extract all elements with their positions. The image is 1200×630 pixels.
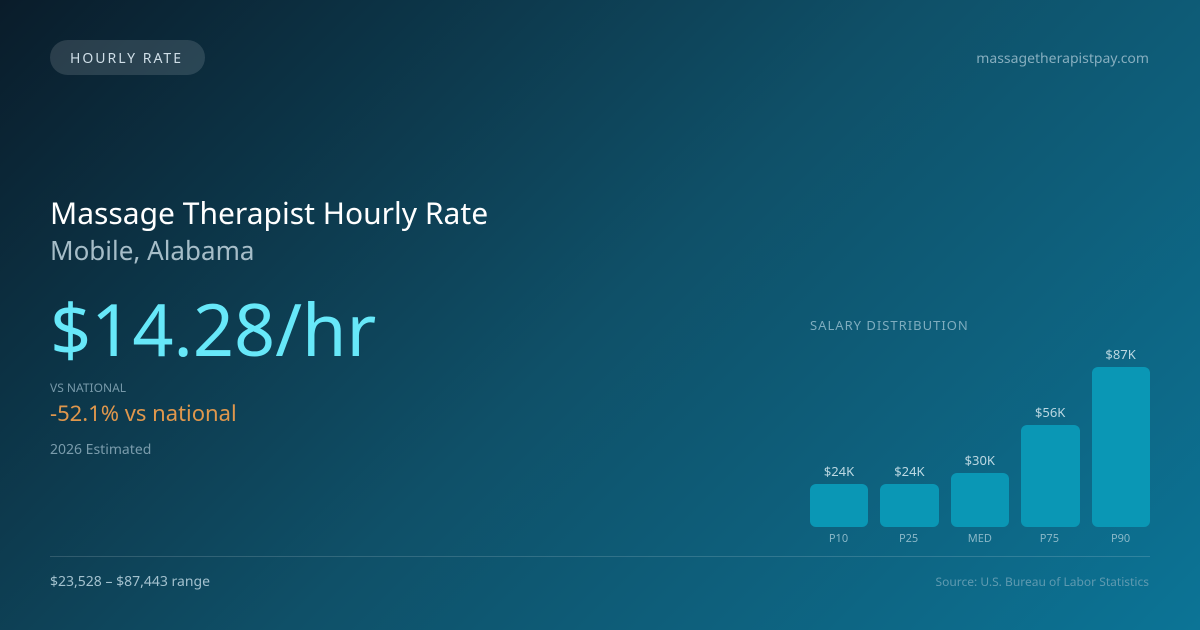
bar P25 (880, 462, 939, 546)
chart: salary distribution (810, 316, 1150, 546)
chart: salary distribution: P75 (1040, 531, 1059, 546)
chart: salary distribution: P10 (829, 531, 848, 546)
chart: salary distribution: $56K (1035, 403, 1065, 421)
chart: salary distribution: P90 (1111, 531, 1130, 546)
location subtitle: Mobile, Alabama (50, 232, 254, 268)
salary range: $23,528 – $87,443 range (50, 572, 210, 591)
chart: salary distribution: $24K (824, 462, 854, 480)
estimate note: 2026 Estimated (50, 440, 151, 459)
badge: hourly rate (50, 40, 205, 75)
site URL: massagetherapistpay.com (976, 49, 1149, 68)
bar median (951, 451, 1009, 546)
bar P90 (1092, 345, 1150, 546)
chart: salary distribution: P25 (899, 531, 918, 546)
badge: hourly rate: HOURLY RATE (70, 49, 183, 68)
title: Massage Therapist Hourly Rate (50, 192, 488, 233)
hourly rate value: $14.28/hr (50, 280, 376, 378)
chart heading: SALARY DISTRIBUTION (810, 316, 969, 334)
comparison value: -52.1% vs national (50, 398, 237, 428)
bar P10 (810, 462, 868, 546)
comparison label: VS NATIONAL (50, 379, 126, 396)
chart: salary distribution: $30K (965, 451, 995, 469)
chart: salary distribution: MED (968, 531, 992, 546)
chart: salary distribution: $87K (1105, 345, 1136, 363)
bar P75 (1021, 403, 1080, 546)
chart: salary distribution: $24K (894, 462, 925, 480)
source: Source: U.S. Bureau of Labor Statistics (936, 573, 1149, 590)
